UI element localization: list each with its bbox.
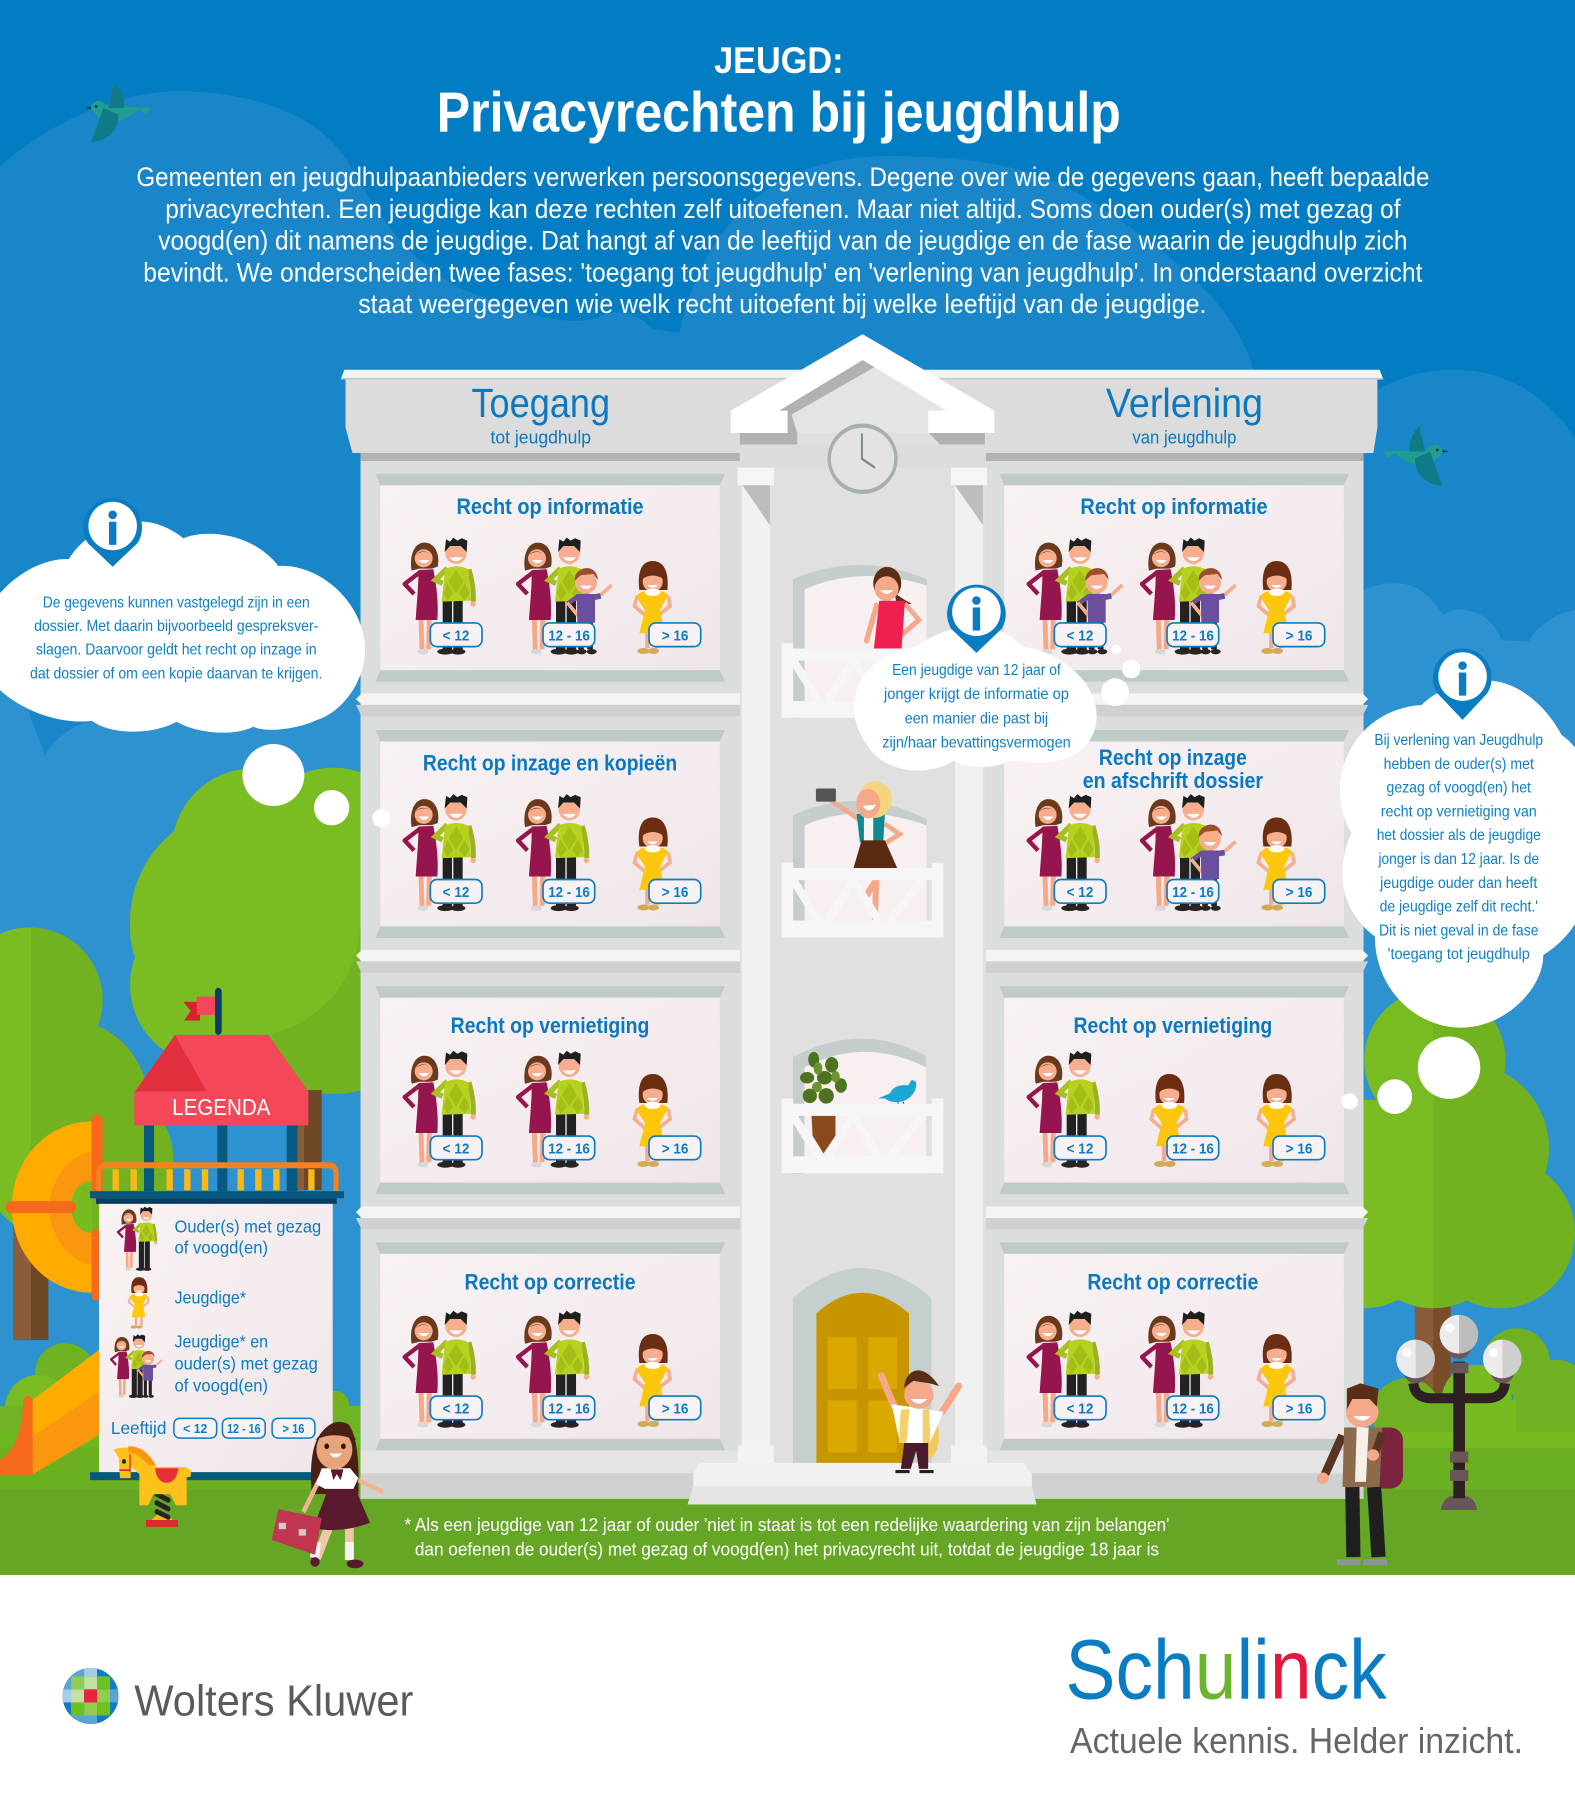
- panel: Verlening, recht op inzage en afschrift dossier: Recht op inzage: [1099, 745, 1247, 770]
- thought bubble: verlening info, right: het dossier als de jeugdige: [1377, 827, 1541, 844]
- bird: left: [85, 83, 149, 142]
- panel: Verlening, recht op correctie: < 12: [1067, 1400, 1093, 1417]
- title: Privacyrechten bij jeugdhulp: [437, 81, 1121, 144]
- panel: Toegang, recht op vernietiging: > 16: [662, 1140, 688, 1157]
- logo: Schulinck: Schulinck: [1065, 1623, 1387, 1717]
- panel: Toegang, recht op informatie: < 12: [443, 627, 469, 644]
- panel: Toegang, recht op correctie: 12 - 16: [548, 1400, 590, 1417]
- legend: youth and parents row: of voogd(en): [174, 1375, 268, 1395]
- heading: Verlening: van jeugdhulp: [1132, 427, 1236, 448]
- panel: Toegang, recht op informatie: Recht op informatie: [456, 494, 644, 519]
- panel: Toegang, recht op correctie: Recht op correctie: [465, 1270, 636, 1295]
- thought bubble: verlening info, right: jonger is dan 12 jaar. Is de: [1378, 851, 1539, 868]
- thought bubble: information for under 12, centre: [854, 626, 1141, 771]
- heading: Toegang: [471, 380, 610, 448]
- panel: Toegang, recht op informatie: 12 - 16: [548, 627, 590, 644]
- panel: Toegang, recht op inzage en kopieën: > 16: [662, 884, 688, 901]
- intro text: voogd(en) dit namens de jeugdige. Dat hangt af van de leeftijd van de jeugdige en de fase waarin de jeugdhulp zich: [158, 226, 1407, 256]
- panel: Toegang, recht op vernietiging: Recht op vernietiging: [451, 1013, 649, 1038]
- panel: Verlening, recht op informatie: [1000, 474, 1349, 682]
- panel: Toegang, recht op inzage en kopieën: Recht op inzage en kopieën: [423, 751, 677, 776]
- icon: info pin, centre: [947, 585, 1006, 653]
- logo: Wolters Kluwer: Wolters Kluwer: [134, 1677, 413, 1726]
- thought bubble: verlening info, right: recht op vernietiging van: [1381, 803, 1537, 820]
- panel: Toegang, recht op informatie: > 16: [662, 627, 688, 644]
- panel: Verlening, recht op correctie: [1000, 1242, 1349, 1450]
- playground slide and legend tower: [0, 988, 344, 1480]
- thought bubble: dossier info, left: dossier. Met daarin bijvoorbeeld gespreksver-: [34, 618, 318, 635]
- building: roof and walls: [341, 370, 1383, 1499]
- panel: Toegang, recht op inzage en kopieën: [376, 730, 725, 938]
- bird: right: [1384, 427, 1448, 486]
- panel: Verlening, recht op informatie: Recht op informatie: [1080, 494, 1268, 519]
- thought bubble: information for under 12, centre: Een jeugdige van 12 jaar of: [892, 662, 1061, 679]
- legend: age row: 12 - 16: [227, 1421, 261, 1436]
- icon: info pin, left: [83, 498, 142, 567]
- thought bubble: dossier info, left: [0, 522, 390, 827]
- panel: Toegang, recht op informatie: [376, 474, 725, 682]
- tower window 2 with selfie woman: [782, 781, 943, 937]
- legend: youth row: Jeugdige*: [174, 1287, 246, 1307]
- footnote: [404, 1514, 1169, 1559]
- thought bubble: verlening info, right: [1340, 680, 1575, 1114]
- trees and bushes: right: [1364, 999, 1575, 1448]
- thought bubble: dossier info, left: De gegevens kunnen vastgelegd zijn in een: [43, 594, 310, 611]
- trees and bushes: left: [0, 768, 361, 1432]
- thought bubble: dossier info, left: slagen. Daarvoor geldt het recht op inzage in: [36, 642, 317, 659]
- panel: Verlening, recht op inzage en afschrift dossier: 12 - 16: [1172, 884, 1214, 901]
- logo: Schulinck: Actuele kennis. Helder inzicht.: [1070, 1721, 1523, 1761]
- panel: Toegang, recht op correctie: [376, 1242, 725, 1450]
- panel: Verlening, recht op informatie: > 16: [1286, 627, 1312, 644]
- intro text: staat weergegeven wie welk recht uitoefent bij welke leeftijd van de jeugdige.: [358, 289, 1206, 319]
- panel: Verlening, recht op inzage en afschrift dossier: en afschrift dossier: [1083, 768, 1263, 793]
- panel: Verlening, recht op vernietiging: Recht op vernietiging: [1073, 1013, 1272, 1038]
- thought bubble: information for under 12, centre: zijn/haar bevattingsvermogen: [882, 735, 1071, 752]
- panel: Verlening, recht op inzage en afschrift dossier: > 16: [1286, 884, 1312, 901]
- footnote: * Als een jeugdige van 12 jaar of ouder 'niet in staat is tot een redelijke waardering van zijn belangen': [404, 1514, 1169, 1535]
- title: [437, 40, 1121, 144]
- heading: Verlening: Verlening: [1106, 380, 1263, 426]
- legend: parents row: Ouder(s) met gezag: [174, 1216, 321, 1236]
- character: student with backpack: [1317, 1383, 1403, 1562]
- title: JEUGD:: [714, 40, 844, 81]
- panel: Verlening, recht op correctie: > 16: [1286, 1400, 1312, 1417]
- character: boy at the door: [881, 1370, 959, 1472]
- entrance steps: [688, 1463, 1037, 1505]
- legend: parents row: of voogd(en): [174, 1238, 268, 1258]
- legend: age row: Leeftijd: [111, 1418, 166, 1438]
- panel: Verlening, recht op correctie: Recht op correctie: [1087, 1270, 1258, 1295]
- panel: Toegang, recht op vernietiging: < 12: [443, 1140, 469, 1157]
- legend: youth and parents row: Jeugdige* en: [174, 1331, 268, 1351]
- tower window 1 with woman in red: [782, 565, 943, 718]
- panel: Toegang, recht op inzage en kopieën: 12 - 16: [548, 884, 590, 901]
- logo: Wolters Kluwer: [62, 1668, 413, 1724]
- panel: Verlening, recht op inzage en afschrift dossier: < 12: [1067, 884, 1093, 901]
- panel: Verlening, recht op informatie: < 12: [1067, 627, 1093, 644]
- panel: Toegang, recht op vernietiging: 12 - 16: [548, 1140, 590, 1157]
- intro text: Gemeenten en jeugdhulpaanbieders verwerken persoonsgegevens. Degene over wie de gegevens gaan, heeft bepaalde: [136, 162, 1429, 192]
- tower window 3 with plant and blue bird: [782, 1039, 943, 1174]
- legend title: LEGENDA: [172, 1094, 271, 1120]
- front door: [738, 1268, 987, 1464]
- intro text: [136, 162, 1429, 319]
- panel: Toegang, recht op correctie: < 12: [443, 1400, 469, 1417]
- street lamp: [1396, 1315, 1522, 1510]
- character: girl with red bag: [272, 1422, 383, 1568]
- intro text: privacyrechten. Een jeugdige kan deze rechten zelf uitoefenen. Maar niet altijd. Soms doen ouder(s) met gezag of: [165, 194, 1401, 224]
- intro text: bevindt. We onderscheiden twee fases: 'toegang tot jeugdhulp' en 'verlening van jeugdhulp'. In onderstaand overzicht: [143, 257, 1423, 287]
- central tower: [731, 334, 994, 1468]
- logo: Schulinck: [1065, 1623, 1523, 1761]
- panel: Verlening, recht op vernietiging: > 16: [1286, 1140, 1312, 1157]
- legend: parents row: [118, 1207, 321, 1271]
- panel: Verlening, recht op inzage en afschrift dossier: [1000, 730, 1349, 938]
- legend: youth and parents row: ouder(s) met gezag: [174, 1353, 318, 1373]
- thought bubble: verlening info, right: jeugdige ouder dan heeft: [1379, 875, 1538, 892]
- thought bubble: verlening info, right: hebben de ouder(s) met: [1384, 756, 1534, 773]
- thought bubble: verlening info, right: de jeugdige zelf dit recht.': [1380, 899, 1538, 916]
- legend: age row: < 12: [183, 1421, 207, 1436]
- legend: youth and parents row: [111, 1331, 318, 1398]
- legend: youth row: [129, 1277, 246, 1329]
- legend: age row: > 16: [283, 1421, 304, 1436]
- panel: Verlening, recht op vernietiging: [1000, 986, 1349, 1194]
- thought bubble: dossier info, left: dat dossier of om een kopie daarvan te krijgen.: [30, 665, 322, 682]
- thought bubble: information for under 12, centre: een manier die past bij: [905, 710, 1048, 727]
- icon: info pin, right: [1433, 648, 1492, 720]
- thought bubble: verlening info, right: gezag of voogd(en) het: [1387, 780, 1532, 797]
- panel: Verlening, recht op vernietiging: 12 - 16: [1172, 1140, 1214, 1157]
- grass ground: [0, 1406, 1575, 1575]
- thought bubble: verlening info, right: 'toegang tot jeugdhulp: [1388, 946, 1530, 963]
- panel: Verlening, recht op vernietiging: < 12: [1067, 1140, 1093, 1157]
- panel: Toegang, recht op inzage en kopieën: < 12: [443, 884, 469, 901]
- legend: age row: [111, 1418, 315, 1438]
- footnote: dan oefenen de ouder(s) met gezag of voogd(en) het privacyrecht uit, totdat de jeugdige 18 jaar is: [415, 1538, 1159, 1559]
- thought bubble: information for under 12, centre: jonger krijgt de informatie op: [883, 686, 1069, 703]
- panel: Verlening, recht op informatie: 12 - 16: [1172, 627, 1214, 644]
- heading: Verlening: [1106, 380, 1263, 448]
- heading: Toegang: Toegang: [471, 380, 610, 426]
- white footer background: [0, 1575, 1575, 1812]
- heading: Toegang: tot jeugdhulp: [491, 427, 591, 448]
- thought bubble: verlening info, right: Bij verlening van Jeugdhulp: [1374, 732, 1543, 749]
- panel: Toegang, recht op vernietiging: [376, 986, 725, 1194]
- panel: Toegang, recht op correctie: > 16: [662, 1400, 688, 1417]
- rocking horse: [113, 1446, 191, 1527]
- thought bubble: verlening info, right: Dit is niet geval in de fase: [1379, 922, 1538, 939]
- panel: Verlening, recht op correctie: 12 - 16: [1172, 1400, 1214, 1417]
